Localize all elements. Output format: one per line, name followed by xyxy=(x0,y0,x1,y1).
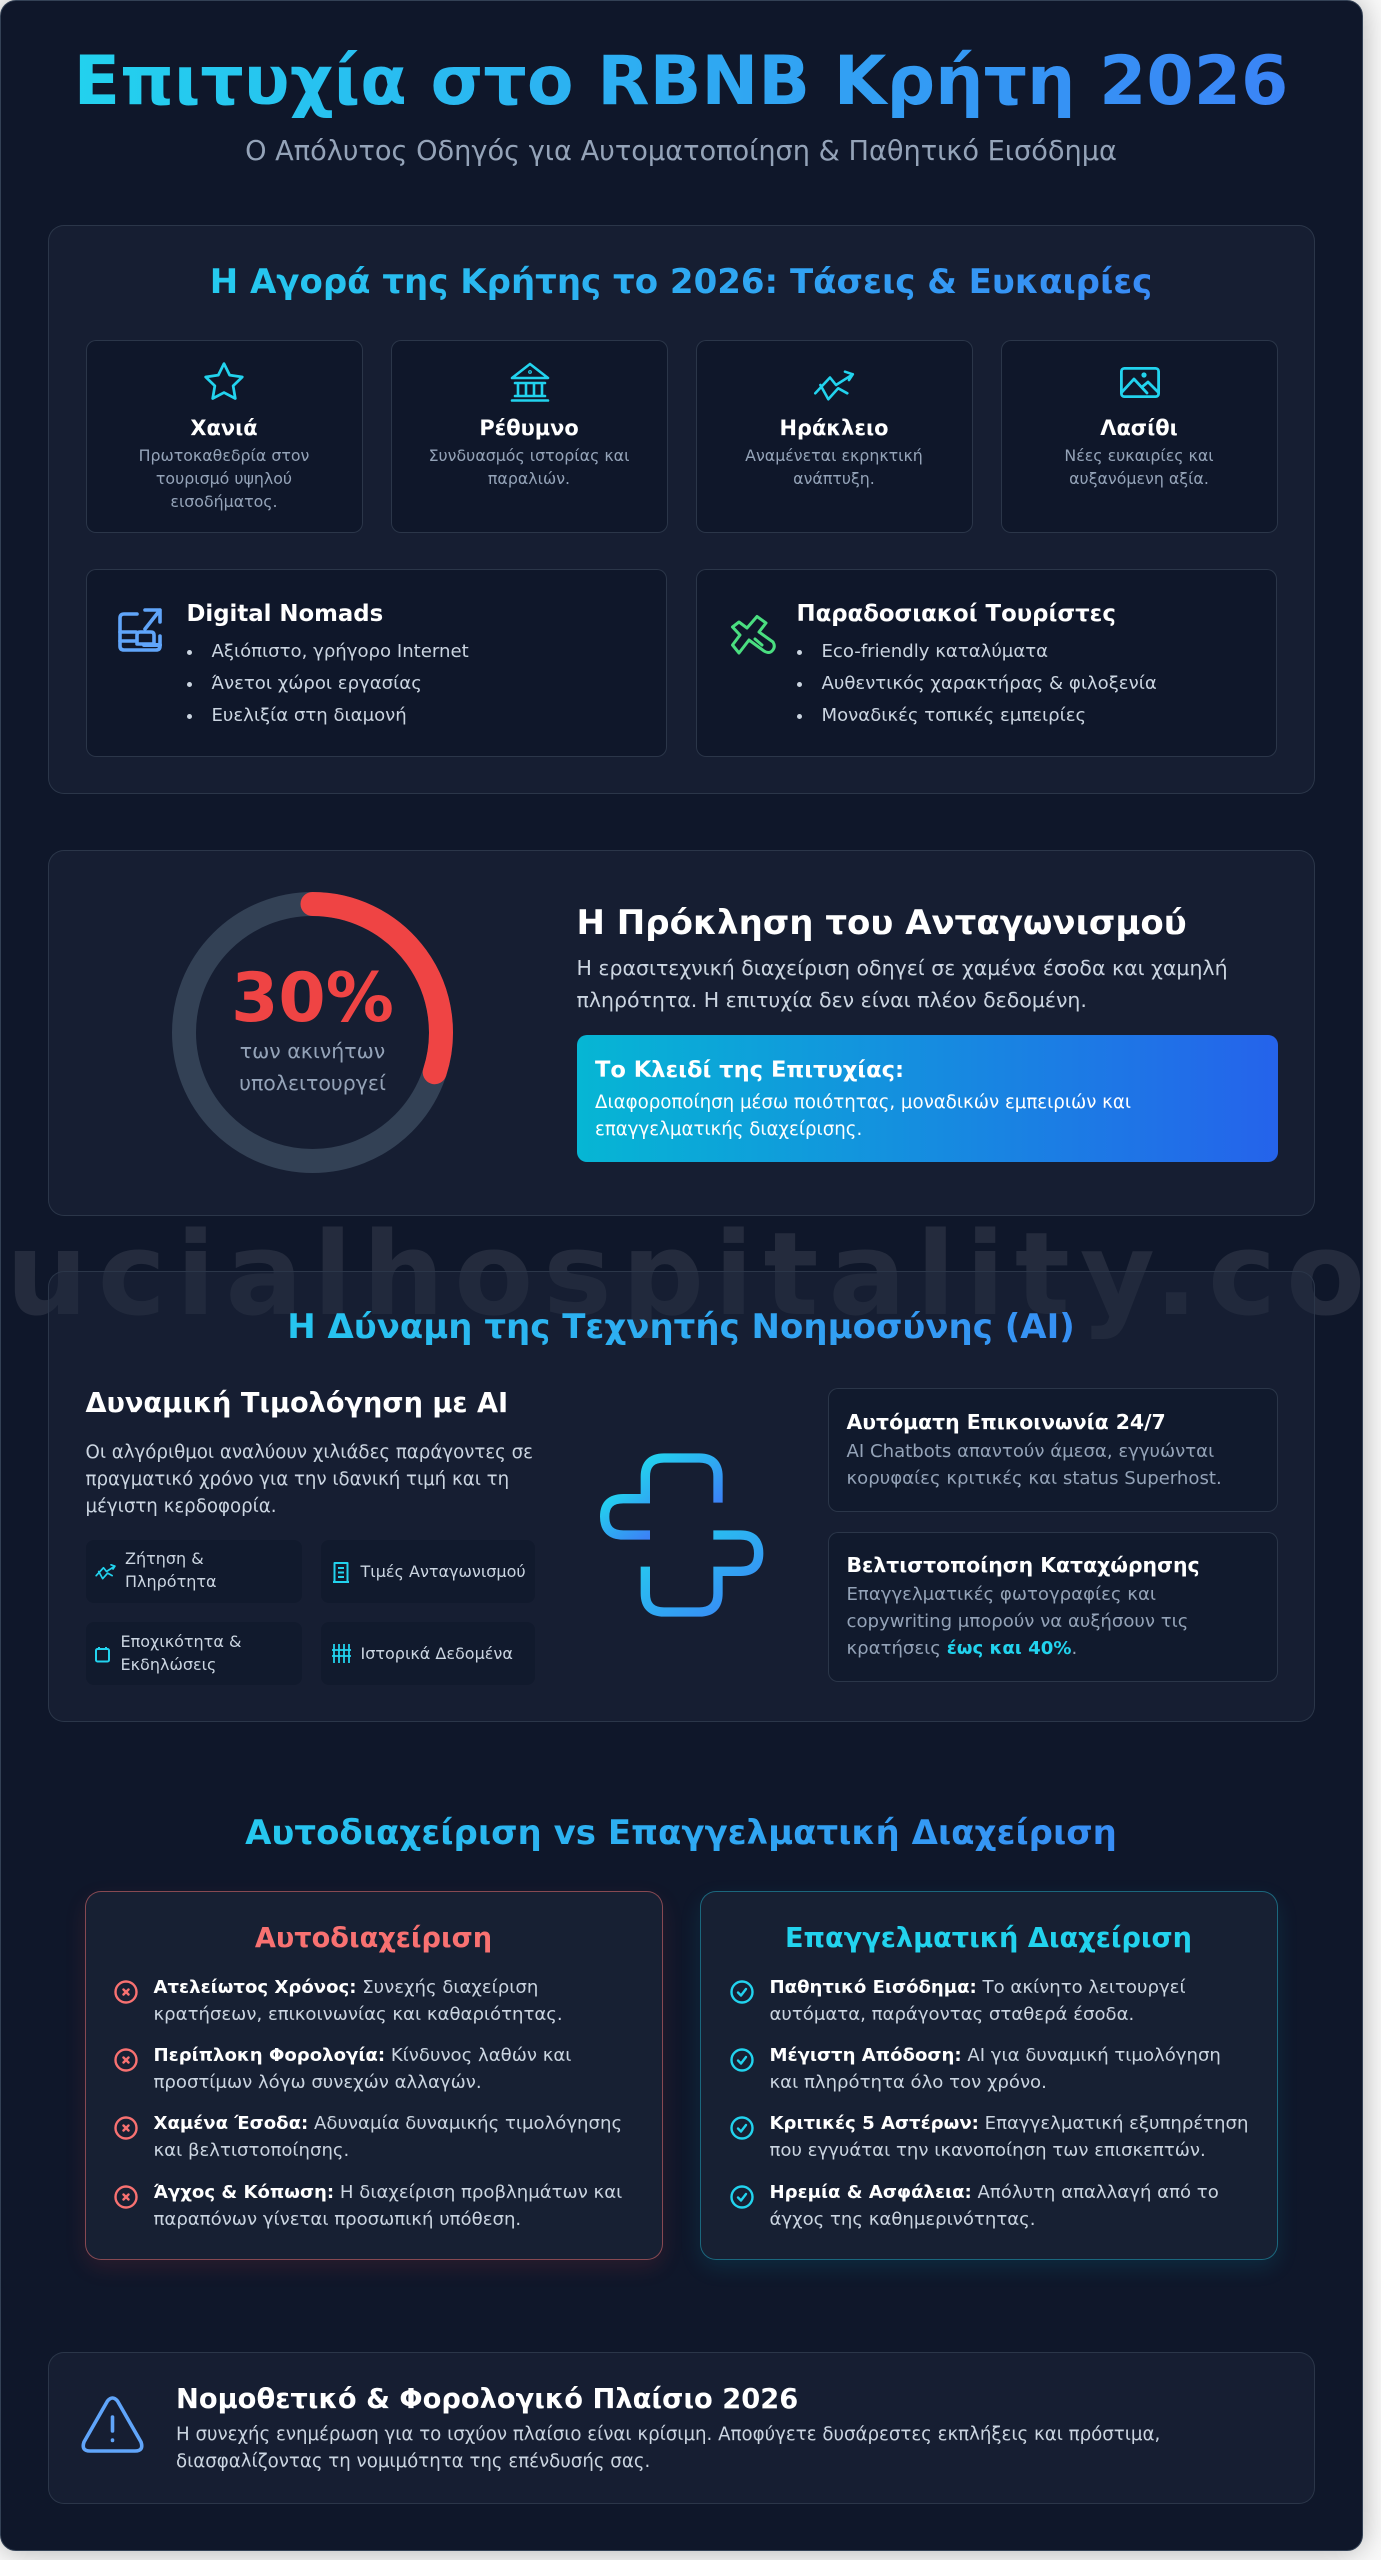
city description: Αναμένεται εκρηκτική xyxy=(745,446,923,465)
factor: demand xyxy=(86,1540,302,1602)
city card: Heraklion xyxy=(696,340,972,532)
city description xyxy=(1064,446,1214,488)
card heading: Αυτόματη Επικοινωνία 24/7 xyxy=(846,1410,1166,1434)
paragraph: μέγιστη κερδοφορία. xyxy=(86,1496,277,1517)
label: Πληρότητα xyxy=(125,1572,217,1591)
card text: AI Chatbots απαντούν άμεσα, εγγυώνται xyxy=(846,1440,1214,1462)
stat caption xyxy=(239,1038,386,1094)
card text: κορυφαίες κριτικές και status Superhost. xyxy=(846,1468,1222,1489)
panel: competition xyxy=(48,850,1314,1216)
heading: AI xyxy=(86,1304,1276,1348)
panel heading: Επαγγελματική Διαχείριση xyxy=(785,1922,1192,1954)
city name: Λασίθι xyxy=(1100,416,1178,440)
icon: cross xyxy=(114,2116,138,2140)
needs list: Μοναδικές τοπικές εμπειρίες xyxy=(822,704,1086,726)
city description xyxy=(139,446,309,511)
heading: Digital Nomads xyxy=(186,600,383,626)
label: Ιστορικά Δεδομένα xyxy=(360,1644,513,1662)
item xyxy=(770,2178,1219,2234)
factor: competitor prices xyxy=(320,1540,534,1602)
item xyxy=(154,1976,563,2025)
item xyxy=(770,2110,1248,2164)
paragraph xyxy=(576,956,1228,1012)
item: κρατήσεων, επικοινωνίας και καθαριότητας. xyxy=(154,2004,563,2025)
item: Μέγιστη Απόδοση: AI για δυναμική τιμολόγηση xyxy=(770,2044,1221,2066)
city description: Νέες ευκαιρίες και xyxy=(1064,446,1214,465)
paragraph xyxy=(86,1442,533,1517)
item: Κριτικές 5 Αστέρων: Επαγγελματική εξυπηρέτηση xyxy=(770,2112,1248,2134)
item: και πληρότητα όλο τον χρόνο. xyxy=(770,2072,1047,2093)
donut chart 30% xyxy=(172,892,453,1173)
heading: Παραδοσιακοί Τουρίστες xyxy=(796,600,1116,626)
title: Επιτυχία στο RBNB Κρήτη 2026 xyxy=(74,42,1288,120)
icon: check xyxy=(730,2048,754,2072)
city description: τουρισμό υψηλού xyxy=(156,469,292,488)
city description: αυξανόμενη αξία. xyxy=(1069,469,1209,488)
icon: document xyxy=(333,1562,349,1583)
icon: nomad laptop xyxy=(118,608,162,652)
icon: AI plus mark xyxy=(600,1453,764,1617)
icon: check xyxy=(730,2184,754,2208)
icon: landscape xyxy=(1120,367,1160,398)
panel: AI power xyxy=(48,1270,1314,1722)
needs list: Αυθεντικός χαρακτήρας & φιλοξενία xyxy=(822,672,1157,694)
icon: calendar xyxy=(95,1647,110,1662)
city description: εισοδήματος. xyxy=(170,492,278,511)
card: traditional tourists xyxy=(696,568,1276,756)
card: listing optimization xyxy=(828,1532,1278,1682)
city description xyxy=(429,446,629,488)
panel: self management xyxy=(84,1890,662,2260)
needs list xyxy=(187,640,469,726)
callout text: Διαφοροποίηση μέσω ποιότητας, μοναδικών εμπειριών και xyxy=(595,1092,1131,1113)
callout heading: Το Κλειδί της Επιτυχίας: xyxy=(595,1056,904,1082)
icon: cross xyxy=(114,1980,138,2004)
heading: AI: Η Δύναμη της Τεχνητής Νοημοσύνης (AI) xyxy=(287,1306,1075,1346)
icon: check xyxy=(730,2116,754,2140)
item xyxy=(154,2112,622,2161)
label: Εκδηλώσεις xyxy=(120,1655,216,1674)
item: και βελτιστοποίησης. xyxy=(154,2140,349,2161)
item: που εγγυάται την ικανοποίηση των επισκεπτών. xyxy=(770,2140,1206,2161)
city card: Rethymno xyxy=(390,340,668,532)
icon: warning triangle xyxy=(80,2396,144,2452)
city name: Χανιά xyxy=(190,416,258,440)
item: αυτόματα, παράγοντας σταθερά έσοδα. xyxy=(770,2004,1134,2025)
stat caption: των ακινήτων xyxy=(240,1038,385,1062)
paragraph: Η ερασιτεχνική διαχείριση οδηγεί σε χαμένα έσοδα και χαμηλή xyxy=(576,956,1228,980)
heading: Νομοθετικό & Φορολογικό Πλαίσιο 2026 xyxy=(176,2384,798,2414)
heading: comparison xyxy=(86,1810,1276,1854)
factor: seasonality xyxy=(86,1622,302,1684)
icon: check xyxy=(730,1980,754,2004)
label xyxy=(120,1632,241,1674)
card text: Επαγγελματικές φωτογραφίες και xyxy=(846,1584,1156,1604)
card text xyxy=(846,1584,1188,1659)
item xyxy=(154,2044,571,2093)
label: Εποχικότητα & xyxy=(120,1632,241,1651)
city description: Πρωτοκαθεδρία στον xyxy=(139,446,309,465)
item: προστίμων λόγω συνεχών αλλαγών. xyxy=(154,2072,482,2093)
item: Ηρεμία & Ασφάλεια: Απόλυτη απαλλαγή από το xyxy=(770,2182,1219,2202)
paragraph: πληρότητα. Η επιτυχία δεν είναι πλέον δεδομένη. xyxy=(576,988,1087,1012)
icon: trend xyxy=(95,1564,116,1580)
needs list: Άνετοι χώροι εργασίας xyxy=(212,672,422,694)
subtitle: Ο Απόλυτος Οδηγός για Αυτοματοποίηση & Παθητικό Εισόδημα xyxy=(245,136,1117,167)
item: άγχος της καθημερινότητας. xyxy=(770,2209,1036,2230)
heading: comparison: Αυτοδιαχείριση vs Επαγγελματική Διαχείριση xyxy=(245,1812,1117,1852)
callout text xyxy=(595,1092,1131,1140)
text: Η συνεχής ενημέρωση για το ισχύον πλαίσιο είναι κρίσιμη. Αποφύγετε δυσάρεστες εκπλήξεις και πρόστιμα, xyxy=(176,2424,1160,2445)
stat caption: υπολειτουργεί xyxy=(239,1070,386,1094)
item: Ατελείωτος Χρόνος: Συνεχής διαχείριση xyxy=(154,1976,538,1998)
item: Περίπλοκη Φορολογία: Κίνδυνος λαθών και xyxy=(154,2044,571,2066)
item: Άγχος & Κόπωση: Η διαχείριση προβλημάτων και xyxy=(154,2182,622,2202)
heading: market: Η Αγορά της Κρήτης το 2026: Τάσεις & Ευκαιρίες xyxy=(210,262,1152,302)
card text: copywriting μπορούν να αυξήσουν τις xyxy=(846,1611,1188,1632)
needs list: Ευελιξία στη διαμονή xyxy=(212,704,407,726)
paragraph: Οι αλγόριθμοι αναλύουν χιλιάδες παράγοντες σε xyxy=(86,1442,533,1462)
label: Τιμές Ανταγωνισμού xyxy=(360,1562,526,1580)
card heading: Βελτιστοποίηση Καταχώρησης xyxy=(846,1552,1200,1576)
item xyxy=(154,2182,622,2230)
heading: competition: Η Πρόκληση του Ανταγωνισμού xyxy=(576,902,1187,942)
icon: cross xyxy=(114,2185,138,2209)
section: comparison xyxy=(80,1812,1279,2272)
city card: Lasithi xyxy=(1000,340,1278,532)
panel: legal and tax framework xyxy=(48,2352,1314,2504)
icon: museum xyxy=(510,362,550,402)
label: Ζήτηση & xyxy=(125,1549,204,1568)
city name: Ρέθυμνο xyxy=(479,416,579,440)
card text: κρατήσεις έως και 40%. xyxy=(846,1638,1077,1659)
item xyxy=(770,1976,1186,2025)
card: digital nomads xyxy=(86,568,666,756)
text xyxy=(176,2421,1160,2476)
icon: star xyxy=(204,362,244,400)
icon: grid xyxy=(332,1644,351,1663)
needs list: Eco-friendly καταλύματα xyxy=(822,640,1048,662)
city description: Συνδυασμός ιστορίας και xyxy=(429,446,629,465)
factor: historical data xyxy=(320,1622,534,1684)
text: διασφαλίζοντας τη νομιμότητα της επένδυσής σας. xyxy=(176,2451,650,2472)
city name: Ηράκλειο xyxy=(780,416,888,440)
item: Παθητικό Εισόδημα: Το ακίνητο λειτουργεί xyxy=(770,1976,1186,1998)
city description: ανάπτυξη. xyxy=(793,469,875,488)
needs list xyxy=(797,640,1157,726)
item: Χαμένα Έσοδα: Αδυναμία δυναμικής τιμολόγησης xyxy=(154,2112,622,2134)
item xyxy=(770,2044,1221,2093)
card: automated communication xyxy=(828,1388,1278,1512)
icon: airplane xyxy=(730,614,776,655)
city card: Chania xyxy=(86,340,362,532)
card text xyxy=(846,1440,1222,1489)
stat value: 30% xyxy=(231,958,394,1038)
callout text: επαγγελματικής διαχείρισης. xyxy=(595,1119,862,1140)
callout: key to success xyxy=(576,1034,1278,1162)
item: παραπόνων γίνεται προσωπική υπόθεση. xyxy=(154,2209,521,2230)
label xyxy=(125,1549,217,1591)
panel heading: Αυτοδιαχείριση xyxy=(255,1922,492,1954)
paragraph: πραγματικό χρόνο για την ιδανική τιμή και τη xyxy=(86,1469,509,1490)
panel: market 2026 xyxy=(48,224,1314,794)
icon: cross xyxy=(114,2048,138,2072)
panel: professional management xyxy=(700,1890,1278,2260)
icon: trend xyxy=(814,370,854,401)
subheading: dynamic pricing: Δυναμική Τιμολόγηση με AI xyxy=(86,1388,508,1418)
needs list: Αξιόπιστο, γρήγορο Internet xyxy=(212,640,469,662)
city description xyxy=(745,446,923,488)
city description: παραλιών. xyxy=(488,469,570,488)
